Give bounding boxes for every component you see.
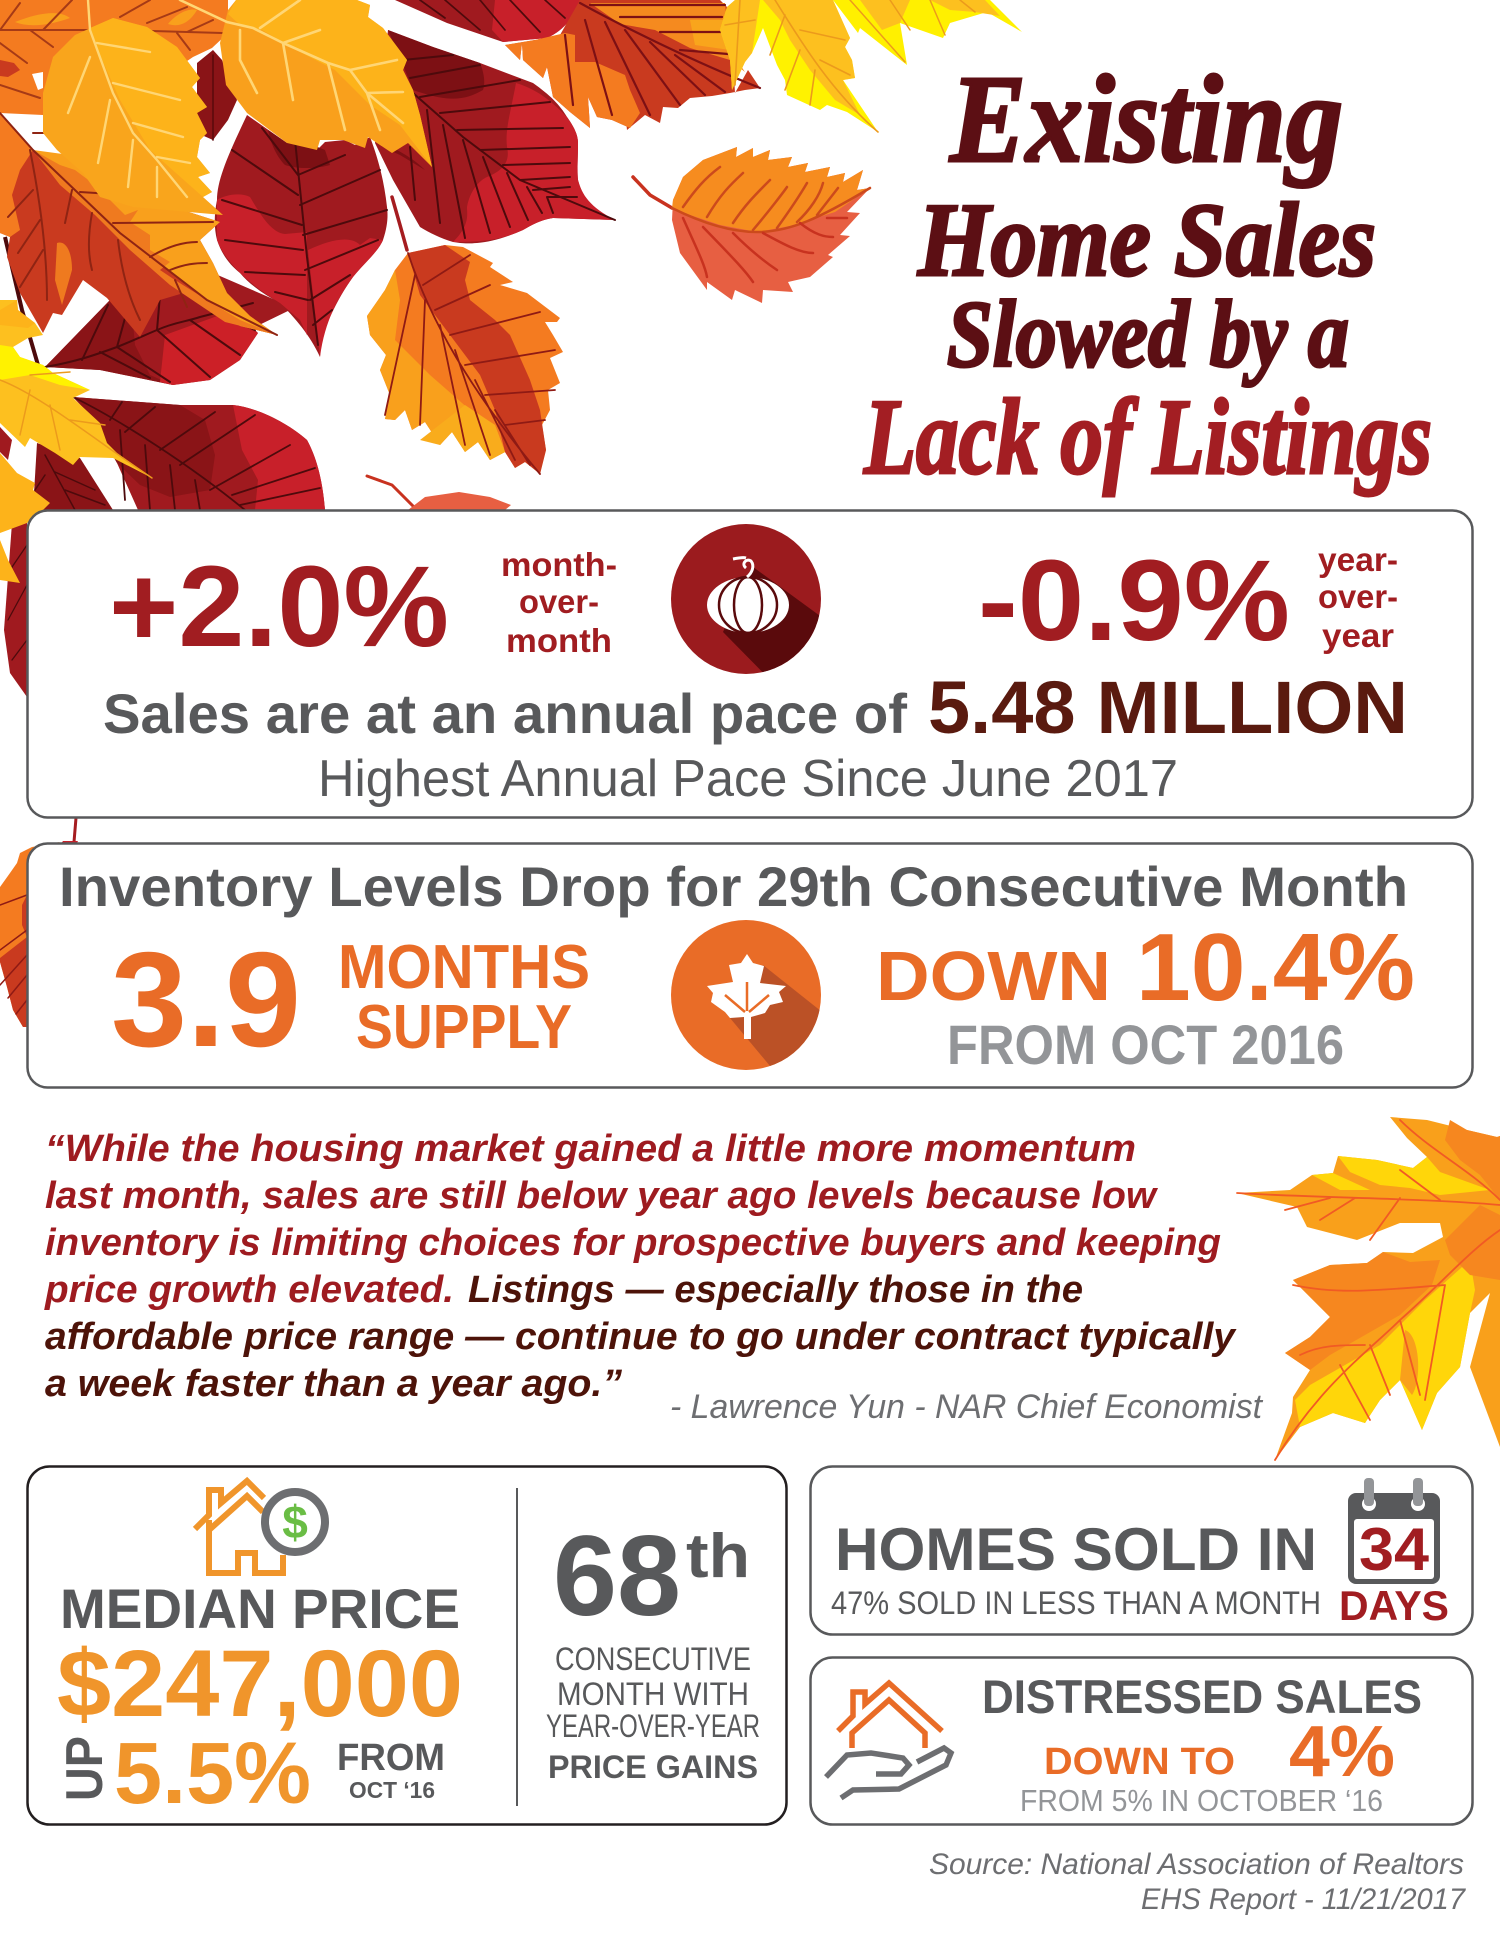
stat: down 10.4 percent: DOWN <box>876 937 1111 1015</box>
label: month-over-month: over- <box>519 583 599 620</box>
heading: inventory: Inventory Levels Drop for 29th Consecutive Month <box>59 855 1408 918</box>
label: from oct 16: OCT ‘16 <box>349 1777 435 1803</box>
icon: house with dollar coin: $ <box>282 1496 308 1548</box>
label: months supply: MONTHS <box>338 933 590 1002</box>
leaf: falling orange and coral <box>633 147 870 303</box>
heading: distressed sales: DISTRESSED SALES <box>982 1670 1422 1723</box>
heading: median price: MEDIAN PRICE <box>60 1577 460 1640</box>
leaf: dark red lower left, cut by box <box>73 397 325 510</box>
title: Slowed by a <box>947 281 1349 387</box>
panel: annual sales pace <box>28 510 1472 818</box>
leaf: yellow amber top centre <box>180 0 432 167</box>
leaf: dark red right with pointed tip <box>375 30 615 243</box>
text: consecutive month: MONTH WITH <box>557 1676 749 1712</box>
panel: inventory levels: 10.4% <box>1136 914 1415 1021</box>
title: Home Sales <box>917 181 1376 298</box>
panel: inventory levels <box>28 844 1472 1090</box>
leaf: yellow pale top <box>720 0 878 132</box>
stat: 3.9 months supply: 3.9 <box>111 924 301 1075</box>
stat: 68th: th <box>686 1522 750 1591</box>
icon: pumpkin badge <box>671 524 821 674</box>
label: from oct 2016: FROM OCT 2016 <box>947 1013 1344 1076</box>
leaf: orange and rust centre <box>367 197 563 474</box>
stat: 68th <box>553 1513 750 1640</box>
decorative maple leaf right <box>1237 1117 1500 1460</box>
label: year-over-year: year <box>1322 617 1394 654</box>
text: annual pace: Sales are at an annual pace of <box>103 682 907 745</box>
leaf: yellow left edge <box>0 300 152 478</box>
label: up: UP <box>56 1736 114 1801</box>
quote from economist: a week faster than a year ago.” <box>45 1363 622 1405</box>
leaf: rust orange top <box>505 0 760 130</box>
leaf: dark maroon between top leaves <box>197 50 237 140</box>
panel: median price <box>28 1466 786 1824</box>
label: from oct 16: FROM <box>337 1737 445 1779</box>
leaf: yellow top right <box>833 0 1022 65</box>
stat: month over month: +2.0% <box>109 543 449 671</box>
decorative autumn leaves top left <box>0 0 1022 1027</box>
quote from economist <box>44 1128 1237 1405</box>
label: month-over-month: month <box>506 622 612 659</box>
quote from economist: last month, sales are still below year ago levels because low <box>45 1175 1158 1217</box>
leaf: dark red top <box>395 0 580 42</box>
label: month-over-month: month- <box>501 546 617 583</box>
label: days: DAYS <box>1339 1582 1449 1629</box>
leaf: big orange left <box>0 113 277 337</box>
text: consecutive month <box>546 1641 760 1785</box>
leaf: amber large left <box>43 0 223 215</box>
stat: down to 4 percent <box>1044 1712 1395 1792</box>
panel: distressed sales <box>810 1658 1472 1824</box>
label: year-over-year <box>1318 541 1398 654</box>
quote from economist: price growth elevated. <box>44 1269 454 1311</box>
icon: maple leaf badge <box>671 920 821 1070</box>
text: 47 percent: 47% SOLD IN LESS THAN A MONTH <box>831 1585 1321 1621</box>
label: month-over-month <box>501 546 617 659</box>
leaf: dark red left of wedge <box>33 443 113 510</box>
stat: down to 4 percent: 4% <box>1289 1712 1395 1792</box>
quote from economist: affordable price range — continue to go under contract typically <box>45 1316 1237 1358</box>
leaf: small coral peeking above box <box>367 476 511 510</box>
leaf: dark red centre hanging <box>215 115 388 357</box>
label: year-over-year: year- <box>1318 541 1398 578</box>
stem: dark twig on left <box>5 237 38 365</box>
text: consecutive month: PRICE GAINS <box>548 1749 758 1785</box>
attribution: - Lawrence Yun - NAR Chief Economist <box>670 1388 1264 1426</box>
title: Existing <box>949 51 1343 189</box>
leaf: dark red behind first box left edge <box>0 427 27 697</box>
quote from economist: “While the housing market gained a little more momentum <box>45 1128 1136 1170</box>
stat: year over year: -0.9% <box>978 537 1290 665</box>
stat: price: $247,000 <box>57 1631 463 1737</box>
heading: homes sold: HOMES SOLD IN <box>835 1516 1317 1583</box>
icon: calendar 34 <box>1348 1478 1440 1584</box>
label: from oct 16 <box>337 1737 445 1803</box>
stat: 5.48 million: 5.48 MILLION <box>928 666 1408 749</box>
leaf: orange behind second box <box>0 818 78 1027</box>
stat: down to 4 percent: DOWN TO <box>1044 1741 1235 1783</box>
label: year-over-year: over- <box>1318 578 1398 615</box>
text: consecutive month: CONSECUTIVE <box>555 1641 751 1677</box>
icon: house with dollar coin <box>195 1481 325 1573</box>
label: months supply: SUPPLY <box>356 993 572 1062</box>
panel: homes sold in days <box>810 1466 1472 1634</box>
text: highest pace: Highest Annual Pace Since June 2017 <box>318 750 1178 808</box>
source note: Source: National Association of Realtors <box>929 1848 1464 1881</box>
quote from economist: inventory is limiting choices for prospective buyers and keeping <box>45 1222 1221 1264</box>
leaf: amber small lower left edge <box>0 453 50 583</box>
source note <box>929 1848 1466 1916</box>
source note: EHS Report - 11/21/2017 <box>1141 1883 1466 1916</box>
title <box>863 51 1432 497</box>
text: from 5 percent: FROM 5% IN OCTOBER ‘16 <box>1020 1783 1383 1818</box>
stat: 68th: 68 <box>553 1513 681 1640</box>
text: consecutive month: YEAR-OVER-YEAR <box>546 1708 760 1744</box>
leaf: orange background top left <box>0 0 228 115</box>
leaf: dark red horizontal <box>45 273 290 385</box>
icon: house in hand <box>826 1683 951 1798</box>
stat: 5.5 percent: 5.5% <box>114 1725 311 1822</box>
quote from economist: Listings — especially those in the <box>468 1269 1083 1311</box>
icon: calendar 34: 34 <box>1359 1516 1430 1583</box>
label: months supply <box>338 933 590 1062</box>
